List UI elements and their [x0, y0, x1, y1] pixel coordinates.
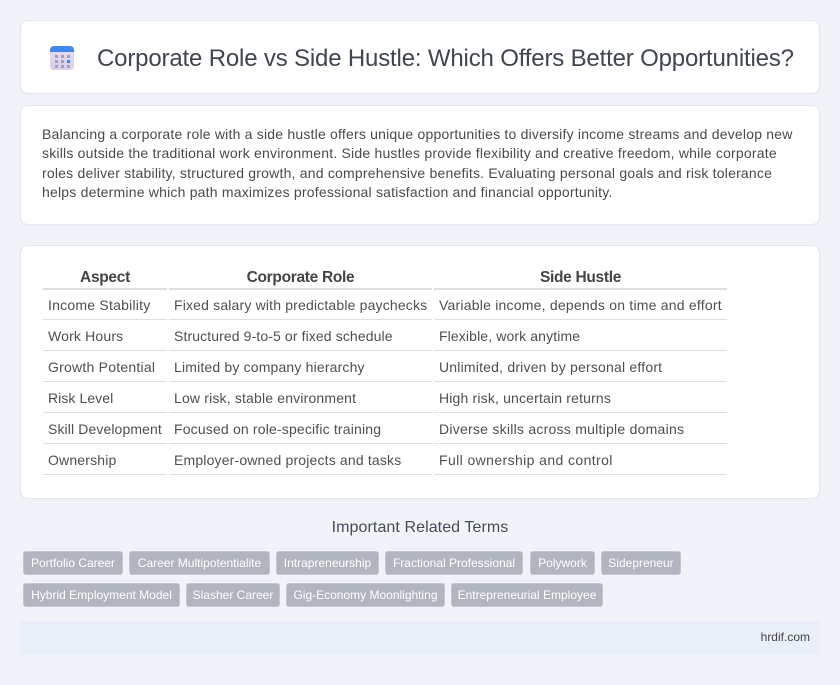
row: income stability: Income Stability [48, 297, 151, 313]
related terms tags: Hybrid Employment Model [31, 588, 172, 602]
row: income stability [48, 297, 722, 313]
row: ownership [48, 452, 613, 468]
related terms tags: Slasher Career [193, 588, 273, 602]
comparison table panel [20, 245, 820, 499]
icon: calendar [50, 46, 74, 70]
related terms tags [23, 551, 681, 607]
row: work hours [48, 328, 580, 344]
row: risk level: Low risk, stable environment [174, 390, 356, 406]
column headers: Corporate Role [247, 269, 354, 286]
row: work hours: Work Hours [48, 328, 123, 344]
related terms tags: Intrapreneurship [284, 556, 371, 570]
footer source: hrdif.com [761, 630, 810, 644]
row: ownership: Full ownership and control [439, 452, 613, 468]
intro paragraph: skills outside the traditional work environment. Side hustles provide flexibility and creative freedom, while corporate [42, 145, 777, 161]
row: growth potential: Growth Potential [48, 359, 155, 375]
header card [20, 20, 820, 94]
row: growth potential: Unlimited, driven by personal effort [439, 359, 662, 375]
related terms tags: Portfolio Career [31, 556, 115, 570]
row: income stability: Variable income, depends on time and effort [439, 297, 722, 313]
row: risk level: Risk Level [48, 390, 113, 406]
related terms tags: Career Multipotentialite [138, 556, 261, 570]
row: ownership: Ownership [48, 452, 116, 468]
row: income stability: Fixed salary with predictable paychecks [174, 297, 427, 313]
footer bar [20, 621, 820, 655]
row: growth potential: Limited by company hierarchy [174, 359, 365, 375]
column headers: Aspect [80, 269, 130, 286]
related terms tags: Entrepreneurial Employee [458, 588, 596, 602]
related terms tags: Sidepreneur [608, 556, 674, 570]
comparison table [43, 269, 727, 475]
related terms tags: Gig-Economy Moonlighting [293, 588, 438, 602]
column headers: Side Hustle [540, 269, 621, 286]
intro paragraph [42, 126, 793, 200]
row: skill development: Skill Development [48, 421, 162, 437]
column headers [80, 269, 621, 286]
row: skill development [48, 421, 684, 437]
related terms heading: Important Related Terms [332, 519, 508, 536]
intro paragraph: helps determine which path maximizes professional satisfaction and financial opportunity. [42, 184, 612, 200]
title: Corporate Role vs Side Hustle: Which Offers Better Opportunities? [97, 45, 794, 72]
row: growth potential [48, 359, 662, 375]
row: work hours: Flexible, work anytime [439, 328, 580, 344]
row: ownership: Employer-owned projects and tasks [174, 452, 401, 468]
row: skill development: Focused on role-specific training [174, 421, 381, 437]
row: work hours: Structured 9-to-5 or fixed schedule [174, 328, 393, 344]
intro paragraph: Balancing a corporate role with a side hustle offers unique opportunities to diversify income streams and develop new [42, 126, 793, 142]
row: risk level: High risk, uncertain returns [439, 390, 611, 406]
intro text panel [20, 105, 820, 225]
intro paragraph: roles deliver stability, structured growth, and comprehensive benefits. Evaluating personal goals and risk tolerance [42, 165, 772, 181]
row: risk level [48, 390, 611, 406]
related terms tags: Polywork [538, 556, 587, 570]
row: skill development: Diverse skills across multiple domains [439, 421, 684, 437]
related terms tags: Fractional Professional [393, 556, 515, 570]
